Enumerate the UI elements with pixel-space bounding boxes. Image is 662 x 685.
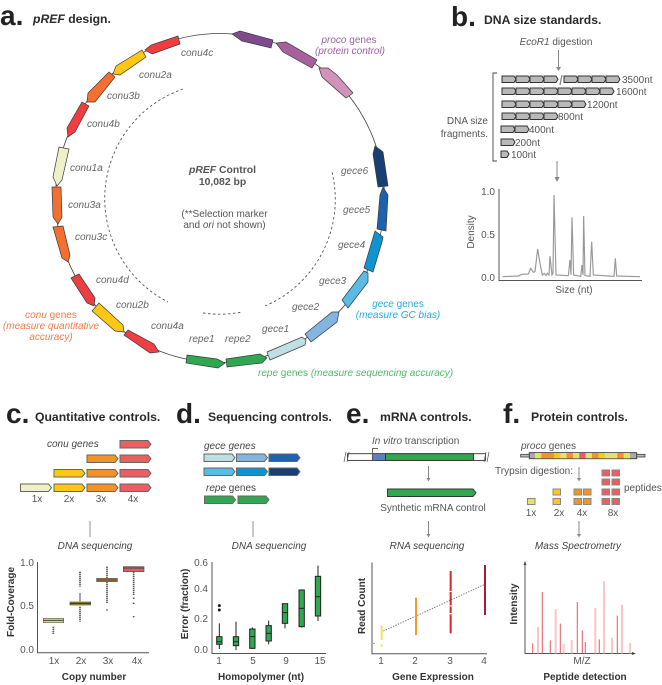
panel: f protein controls [495, 398, 662, 683]
peptide squares [528, 470, 620, 504]
gene labels: gece2 [292, 302, 320, 313]
scatter: read count: 2 [412, 656, 418, 667]
scatter: read count: 4 [481, 656, 487, 667]
density chart: 0.0 [481, 273, 495, 284]
gene labels: conu4b [87, 119, 120, 130]
DNA sequencing label: DNA sequencing [58, 541, 133, 552]
panel letter d: d. [176, 398, 201, 429]
center label: pREF Control [188, 165, 256, 176]
fragment size labels: 800nt [558, 112, 583, 123]
multiplicity labels: 2x [554, 508, 564, 519]
gece callout [356, 299, 440, 321]
fragment bracket [493, 73, 497, 161]
panel letter b: b. [451, 1, 476, 32]
gece callout: (measure GC bias) [356, 310, 440, 321]
panel: b DNA size standards [441, 1, 653, 296]
heading: mRNA controls. [380, 410, 472, 424]
in vitro label: In vitro transcription [372, 436, 459, 447]
box plot: fold coverage: 0.0 [20, 645, 34, 656]
fragments label: fragments. [441, 129, 488, 140]
fragment size labels: 200nt [515, 138, 540, 149]
EcoR1 label: EcoR1 digestion [520, 37, 592, 48]
density chart: Size (nt) [555, 285, 593, 296]
box plot: fold coverage: 1x [49, 656, 59, 667]
gene labels: conu1a [70, 163, 103, 174]
fragment size labels: 400nt [529, 125, 554, 136]
box plot: fold coverage: 3x [103, 656, 113, 667]
fragments label: DNA size [447, 116, 488, 127]
arrow [252, 521, 254, 537]
gene labels: conu2a [139, 70, 172, 81]
gene labels: conu4c [181, 48, 213, 59]
box plot: fold coverage: Copy number [62, 672, 126, 683]
gece genes label: gece genes [204, 441, 256, 452]
panel letter f: f. [503, 398, 520, 429]
box plot: fold coverage: 0.5 [20, 601, 34, 612]
scatter: read count: 3 [447, 656, 453, 667]
heading: Sequencing controls. [208, 410, 332, 424]
box plot: error: 15 [314, 656, 326, 667]
heading: Quantitative controls. [35, 410, 160, 424]
RNA sequencing label: RNA sequencing [390, 541, 465, 552]
spectrum chart: Peptide detection [543, 672, 627, 683]
gene labels [68, 48, 371, 345]
synthetic mRNA arrow [388, 489, 476, 496]
repe gene arrows [186, 354, 267, 368]
gece callout: gece genes [372, 299, 424, 310]
copy labels [32, 494, 138, 505]
box plot: error: 0.6 [194, 558, 208, 569]
proco callout: (protein control) [315, 46, 385, 57]
box plot: fold coverage: 2x [76, 656, 86, 667]
box plot: error: 1 [216, 656, 222, 667]
inner dashed arcs [105, 89, 335, 314]
arrow: digestion [556, 50, 561, 71]
fragment size labels: 1600nt [616, 87, 647, 98]
arrow [426, 521, 430, 538]
transcription construct [344, 448, 489, 462]
scatter: read count [357, 562, 487, 683]
gene labels: repe2 [225, 334, 251, 345]
conu callout: (measure quantitative [3, 321, 100, 332]
panel letter e: e. [346, 398, 369, 429]
repe callout: repe genes (measure sequencing accuracy) [258, 368, 453, 379]
mass spectrometry label: Mass Spectrometry [535, 541, 622, 552]
density chart: 0.5 [481, 230, 495, 241]
multiplicity labels: 1x [526, 508, 536, 519]
arrow [426, 466, 430, 482]
density chart: 1.0 [481, 187, 495, 198]
center label: and ori not shown) [183, 220, 266, 231]
copy labels: 2x [64, 494, 74, 505]
conu genes label: conu genes [47, 439, 99, 450]
box plot: error: 9 [283, 656, 289, 667]
gene labels: conu4a [151, 321, 184, 332]
box plot: error: 0.0 [194, 645, 208, 656]
spectrum chart [509, 561, 636, 683]
center label: (**Selection marker [181, 209, 268, 220]
heading: DNA size standards: DNA size standards. [484, 13, 601, 27]
copy labels: 3x [96, 494, 106, 505]
multiplicity labels: 8x [608, 508, 618, 519]
panel: d sequencing controls [176, 398, 332, 683]
copy labels: 4x [128, 494, 138, 505]
gece gene arrows [267, 146, 388, 360]
box plot: fold coverage: 1.0 [20, 558, 34, 569]
panel: c quantitative controls [6, 398, 160, 683]
fragment size labels: 1200nt [587, 100, 618, 111]
gene labels: gece4 [338, 240, 366, 251]
scatter: read count: Read Count [357, 577, 368, 634]
trypsin label: Trypsin digestion: [495, 466, 573, 477]
box plot: fold coverage [6, 558, 149, 683]
fragment size labels: 3500nt [622, 75, 653, 86]
heading: Protein controls. [531, 410, 628, 424]
synthetic mRNA label: Synthetic mRNA control [380, 503, 486, 514]
gene labels: gece3 [319, 276, 347, 287]
gene labels: gece1 [262, 324, 289, 335]
repe bars [204, 496, 269, 504]
panel letter c: c. [6, 398, 29, 429]
arrow: to density [554, 161, 560, 182]
gene labels: conu3b [107, 91, 140, 102]
gene stack [20, 440, 151, 492]
box plot: error: Error (fraction) [180, 569, 191, 639]
box plot: error: 5 [250, 656, 256, 667]
center label [181, 165, 268, 231]
conu callout [3, 310, 100, 343]
fragments label [441, 116, 488, 140]
copy labels: 1x [32, 494, 42, 505]
center label: 10,082 bp [199, 177, 246, 188]
spectrum chart: M/Z [573, 656, 591, 667]
fragment size labels [511, 75, 653, 161]
fragment size labels: 100nt [511, 150, 536, 161]
spectrum chart: Intensity [509, 583, 520, 625]
plasmid backbone circle [56, 34, 384, 362]
gece bars [204, 454, 300, 476]
gene labels: conu3a [68, 200, 101, 211]
density chart: Density [466, 215, 477, 249]
box plot: error: 0.2 [194, 614, 208, 625]
gene labels: gece6 [341, 166, 369, 177]
proco callout [315, 35, 385, 57]
panel: a pREF design [0, 0, 453, 379]
gene labels: gece5 [343, 205, 371, 216]
arrow [577, 521, 581, 538]
gene labels: conu3c [75, 232, 107, 243]
panel: e mRNA controls [344, 398, 489, 683]
conu callout: accuracy) [29, 332, 73, 343]
fragment bars [501, 75, 620, 158]
arrow [577, 467, 581, 482]
proco gene arrows [232, 31, 353, 98]
box plot: fold coverage: 4x [132, 656, 142, 667]
scatter: read count: Gene Expression [392, 672, 474, 683]
panel letter a: a. [0, 0, 23, 31]
repe genes label: repe genes [206, 483, 256, 494]
box plot: fold coverage: Fold-Coverage [6, 567, 17, 637]
proco gene construct [521, 453, 645, 459]
multiplicity labels: 4x [577, 508, 587, 519]
gene labels: conu2b [116, 300, 149, 311]
scatter: read count: 1 [378, 656, 384, 667]
gene labels: conu4d [96, 275, 129, 286]
multiplicity labels [526, 508, 618, 519]
peptides label: peptides [624, 483, 662, 494]
box plot: error: 0.4 [194, 584, 208, 595]
arrow [89, 521, 91, 537]
box plot: error: Homopolymer (nt) [218, 672, 304, 683]
density chart [466, 187, 642, 296]
conu gene arrows [52, 36, 180, 353]
box plot: error [180, 558, 326, 683]
gene labels: repe1 [189, 334, 215, 345]
DNA sequencing label: DNA sequencing [232, 541, 307, 552]
proco genes label: proco genes [520, 441, 576, 452]
conu callout: conu genes [25, 310, 77, 321]
proco callout: proco genes [320, 35, 377, 46]
heading: pREF design: pREF design. [32, 12, 111, 26]
